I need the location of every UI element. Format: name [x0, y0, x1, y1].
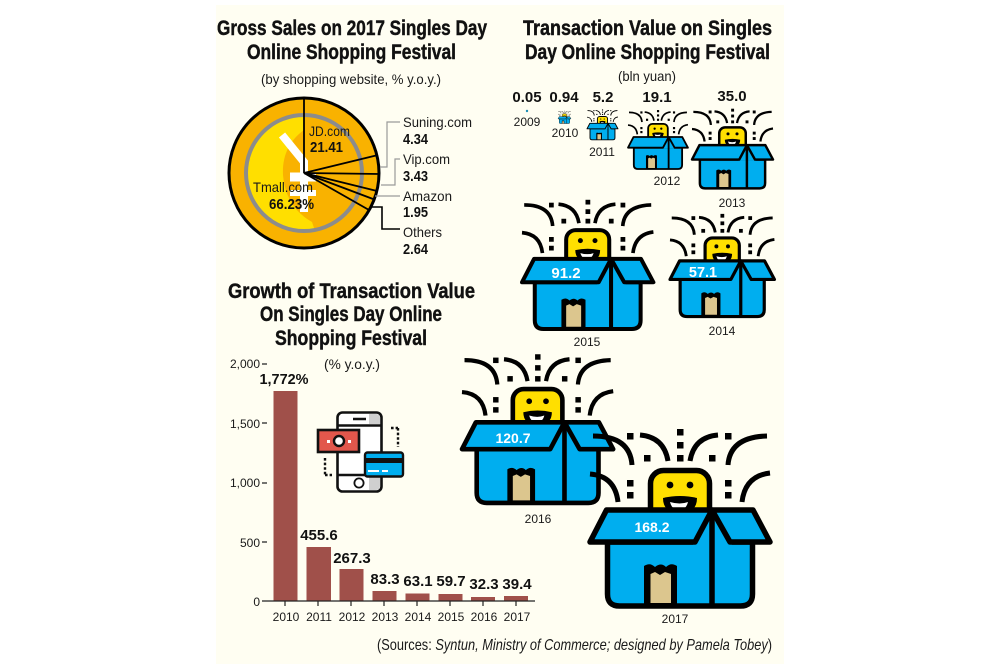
bar chart: growth by year: 63.1: [403, 573, 433, 590]
heading: gross sales: Online Shopping Festival: [247, 41, 456, 64]
heading: gross sales: Gross Sales on 2017 Singles Day: [217, 17, 487, 40]
heading: gross sales: (by shopping website, % y.o.y.): [261, 71, 441, 87]
pie legend with leader lines: [372, 114, 472, 258]
pie legend with leader lines: 3.43: [403, 168, 428, 185]
bar chart: growth by year: 59.7: [436, 573, 466, 590]
2009 value: 0.05: [512, 89, 542, 106]
2012 value: 19.1: [642, 89, 672, 106]
bar chart: growth by year: 1,000: [230, 476, 260, 490]
2015 value: 91.2: [551, 265, 581, 282]
heading: transaction value: [523, 17, 772, 84]
2014 value: 57.1: [689, 265, 717, 281]
pie legend with leader lines: Amazon: [403, 188, 452, 204]
heading: gross sales: [217, 17, 487, 87]
bar chart: growth by year: 500: [240, 536, 260, 550]
pie chart: gross sales by website: 66.23%: [269, 196, 314, 213]
2012 value: 2012: [654, 174, 681, 188]
bar chart: growth by year: 2014: [405, 610, 432, 624]
bar chart: growth by year: 455.6: [300, 527, 338, 544]
2013 value: [692, 88, 773, 210]
bar chart: growth by year: 2015: [438, 610, 465, 624]
2016 value: 120.7: [495, 430, 531, 446]
bar chart: growth by year: 2011: [306, 610, 332, 624]
bar chart: growth by year: 2010: [273, 610, 300, 624]
bar chart: growth by year: 1,500: [230, 417, 260, 431]
2011 value: 5.2: [593, 89, 613, 106]
2017 value: 2017: [662, 612, 689, 626]
2011 value: 2011: [589, 145, 615, 159]
2016 value: 2016: [525, 512, 552, 526]
2012 value: [628, 89, 688, 188]
2013 value: 35.0: [717, 88, 747, 105]
pie legend with leader lines: Vip.com: [403, 151, 450, 167]
2014 value: 2014: [709, 324, 736, 338]
2009 value: [512, 89, 542, 129]
2010 value: 0.94: [549, 89, 579, 106]
2011 value: [587, 89, 618, 159]
bar chart: growth by year: 83.3: [370, 571, 400, 588]
pie legend with leader lines: 1.95: [403, 204, 428, 221]
bar chart: growth by year: 32.3: [469, 576, 499, 593]
heading: growth of transaction value: Growth of Transaction Value: [228, 280, 475, 303]
pie chart: gross sales by website: Tmall.com: [253, 179, 313, 195]
bar chart: growth by year: 2016: [471, 610, 498, 624]
pie chart: gross sales by website: [229, 97, 380, 248]
sources note: (Sources: Syntun, Ministry of Commerce; designed by Pamela Tobey): [377, 637, 772, 654]
pie legend with leader lines: Others: [403, 224, 442, 240]
2013 value: 2013: [719, 196, 746, 210]
heading: transaction value: (bln yuan): [618, 68, 676, 84]
pie legend with leader lines: Suning.com: [403, 114, 472, 130]
2010 value: [549, 89, 579, 140]
2014 value: [670, 214, 774, 338]
pie legend with leader lines: 2.64: [403, 241, 429, 258]
background panel: [216, 5, 784, 664]
2016 value: [462, 354, 613, 526]
icon: yuan sign: [282, 135, 316, 212]
heading: transaction value: Day Online Shopping Festival: [525, 41, 770, 64]
2017 value: [590, 429, 770, 626]
2015 value: [522, 200, 653, 349]
bar chart: growth by year: 267.3: [333, 550, 371, 567]
bar chart: growth by year: 2013: [372, 610, 399, 624]
pie legend with leader lines: 4.34: [403, 131, 429, 148]
bar chart: growth by year: 2012: [339, 610, 366, 624]
heading: growth of transaction value: (% y.o.y.): [324, 356, 380, 372]
bar chart: growth by year: 0: [253, 595, 260, 609]
pie chart: gross sales by website: 21.41: [310, 139, 343, 156]
bar chart: growth by year: 2,000: [230, 357, 260, 371]
icon: phone with money and card: [318, 412, 403, 492]
2017 value: 168.2: [634, 519, 670, 535]
2009 value: 2009: [514, 115, 541, 129]
bar chart: growth by year: 2017: [504, 610, 531, 624]
bar chart: growth by year: [230, 357, 535, 624]
heading: growth of transaction value: [228, 280, 475, 372]
heading: growth of transaction value: On Singles Day Online: [260, 303, 442, 326]
heading: transaction value: Transaction Value on Singles: [523, 17, 772, 40]
bar chart: growth by year: 1,772%: [260, 371, 308, 388]
heading: growth of transaction value: Shopping Festival: [275, 327, 427, 350]
bar chart: growth by year: 39.4: [502, 576, 532, 593]
2015 value: 2015: [574, 335, 601, 349]
pie chart: gross sales by website: JD.com: [309, 123, 350, 139]
2010 value: 2010: [552, 126, 579, 140]
